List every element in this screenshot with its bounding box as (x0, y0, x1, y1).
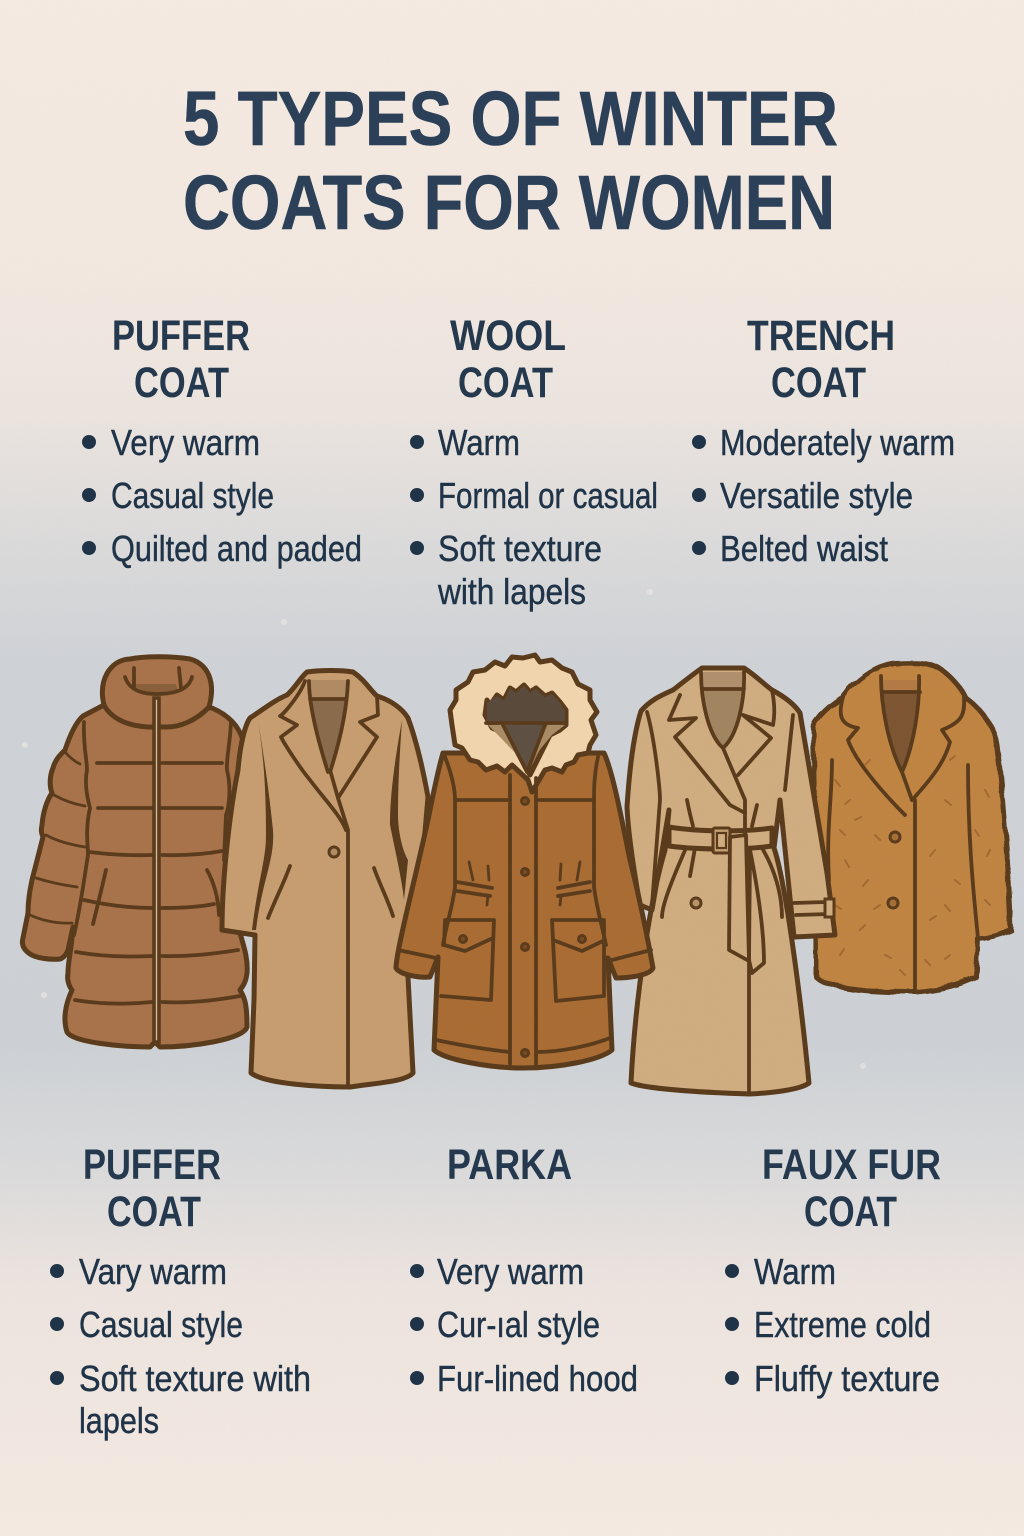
hood lining (485, 697, 566, 775)
bullet list: puffer coat: Very warm (111, 422, 260, 463)
bullet list: parka: Very warm (437, 1251, 584, 1292)
bullet list: puffer coat (82, 422, 362, 569)
bullet list: wool coat: Soft texture (438, 528, 602, 569)
coat: trench (627, 668, 835, 1094)
fur hood trim (450, 655, 597, 792)
heading: puffer coat: PUFFER (112, 312, 250, 360)
lining (309, 680, 347, 700)
lining (882, 680, 920, 692)
parka buttons (460, 798, 586, 1056)
heading: puffer coat second: COAT (107, 1188, 201, 1236)
heading: puffer coat second: PUFFER (83, 1141, 221, 1189)
heading: wool coat: COAT (458, 359, 553, 407)
bullet list: trench coat: Belted waist (720, 528, 888, 569)
cuff strap (794, 902, 829, 915)
bullet list: faux fur coat: Extreme cold (754, 1304, 931, 1345)
bullet list: trench coat: Versatile style (720, 475, 913, 516)
heading: puffer coat second (83, 1141, 221, 1236)
belt buckle (713, 828, 730, 853)
bullet list: trench coat: Moderately warm (720, 422, 955, 463)
belt tails (749, 850, 764, 973)
bullet list: puffer coat: Casual style (111, 475, 274, 516)
heading: faux fur coat (762, 1141, 941, 1236)
parka seams (443, 757, 606, 945)
bullet list: puffer coat second: Soft texture with (79, 1358, 311, 1399)
heading: puffer coat (112, 312, 250, 407)
bullet list: puffer coat second: Vary warm (79, 1251, 227, 1292)
bullet list: faux fur coat (725, 1251, 940, 1399)
bullet list: wool coat (410, 422, 658, 612)
heading: wool coat: WOOL (450, 312, 566, 360)
heading: faux fur coat: FAUX FUR (762, 1141, 941, 1189)
panel: faux fur coat info (725, 1141, 941, 1399)
fur texture (835, 756, 990, 975)
heading: trench coat: TRENCH (747, 312, 895, 360)
bullet list: faux fur coat: Fluffy texture (754, 1358, 940, 1399)
bullet list: wool coat: Warm (438, 422, 520, 463)
illustration: row of five coats (22, 655, 1011, 1094)
coat: faux fur (813, 663, 1011, 992)
bullet list: parka (410, 1251, 638, 1399)
bullet list: wool coat: Formal or casual (438, 475, 658, 516)
bullet list: parka: Fur-lined hood (437, 1358, 638, 1399)
title: COATS FOR WOMEN (183, 160, 835, 246)
title (183, 76, 838, 246)
lining (702, 672, 744, 688)
coat: parka (396, 655, 653, 1068)
bullet list: puffer coat second: Casual style (79, 1304, 243, 1345)
pockets (441, 920, 494, 1000)
heading: wool coat (450, 312, 566, 407)
bullet list: puffer coat second (50, 1251, 311, 1441)
heading: parka: PARKA (447, 1141, 572, 1189)
bullet list: puffer coat: Quilted and paded (111, 528, 362, 569)
snow specks (22, 589, 866, 1069)
heading: puffer coat: COAT (134, 359, 229, 407)
panel: puffer coat info (top) (82, 312, 362, 569)
heading: trench coat: COAT (771, 359, 866, 407)
coat: puffer (22, 657, 247, 1047)
bullet list: puffer coat second: lapels (79, 1400, 159, 1441)
panel: parka info (410, 1141, 638, 1399)
coat: wool (222, 670, 428, 1087)
heading: trench coat (747, 312, 895, 407)
heading: faux fur coat: COAT (804, 1188, 897, 1236)
panel: puffer coat info (bottom) (50, 1141, 311, 1441)
title: 5 TYPES OF WINTER (183, 76, 838, 162)
lapels and seams (841, 697, 964, 815)
drawstring waist (457, 882, 590, 896)
panel: trench coat info (692, 312, 955, 569)
bullet list: trench coat (692, 422, 955, 569)
lining (136, 684, 178, 696)
bullet list: faux fur coat: Warm (754, 1251, 836, 1292)
bullet list: wool coat: with lapels (437, 571, 586, 612)
panel: wool coat info (410, 312, 658, 612)
bullet list: parka: Cur-ıal style (437, 1304, 600, 1345)
